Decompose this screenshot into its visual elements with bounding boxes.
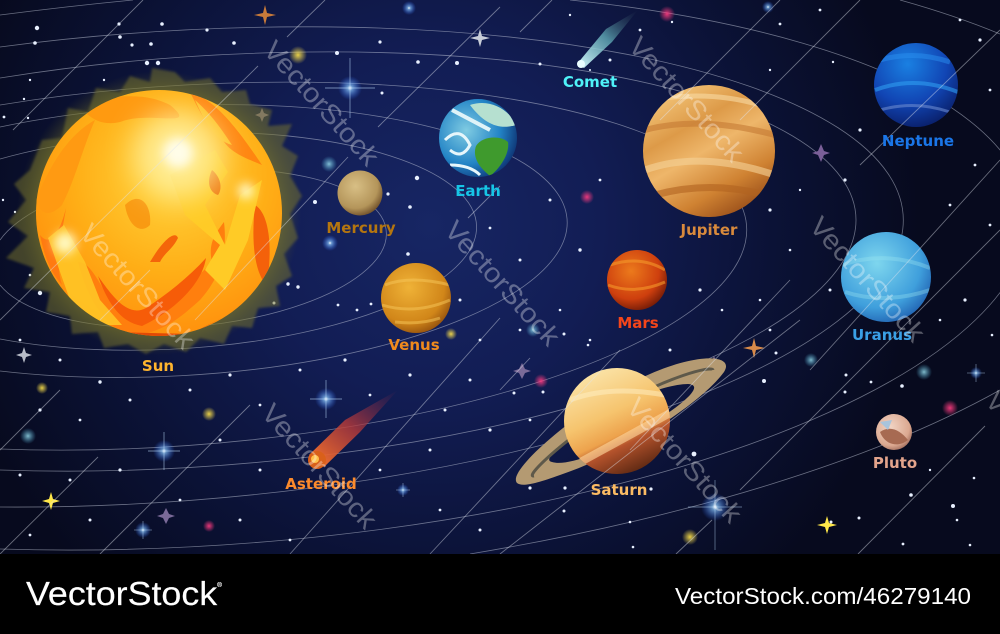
label: Mercury: Mercury bbox=[326, 219, 396, 237]
icon: Mercury bbox=[338, 170, 382, 216]
icon: Comet bbox=[577, 10, 638, 68]
label: Asteroid: Asteroid bbox=[285, 475, 357, 493]
label: Comet: Comet bbox=[563, 73, 617, 91]
footer url: VectorStock.com/46279140 bbox=[675, 583, 971, 609]
label: Mars: Mars bbox=[617, 314, 659, 332]
icon: Saturn bbox=[516, 358, 726, 485]
watermarks: VectorStock bbox=[256, 398, 383, 535]
watermarks: VectorStock bbox=[623, 31, 750, 168]
icon: Venus bbox=[381, 263, 451, 333]
footer brand: ® bbox=[217, 582, 223, 589]
icon: Uranus bbox=[841, 232, 931, 322]
label: Earth: Earth bbox=[455, 182, 501, 200]
label: Saturn: Saturn bbox=[591, 481, 647, 499]
icon: Sun bbox=[6, 68, 302, 355]
footer bar bbox=[0, 554, 1000, 634]
icon: Neptune bbox=[874, 43, 958, 127]
label: Venus: Venus bbox=[388, 336, 440, 354]
watermarks: VectorStock bbox=[804, 211, 931, 348]
watermarks: VectorStock bbox=[439, 215, 566, 352]
label: Uranus: Uranus bbox=[852, 326, 912, 344]
watermarks: VectorStock bbox=[621, 392, 748, 529]
watermarks: VectorStock bbox=[74, 218, 201, 355]
watermarks bbox=[74, 31, 1000, 535]
labels bbox=[142, 73, 954, 499]
icon: Mars bbox=[607, 250, 667, 310]
watermarks: VectorStock bbox=[258, 35, 385, 172]
footer brand: VectorStock bbox=[26, 575, 202, 612]
icon: Asteroid bbox=[308, 390, 398, 469]
label: Neptune: Neptune bbox=[882, 132, 954, 150]
label: Jupiter: Jupiter bbox=[680, 221, 738, 239]
icon: Jupiter bbox=[643, 85, 775, 217]
icon: Earth bbox=[439, 99, 517, 177]
label: Sun: Sun bbox=[142, 357, 174, 375]
label: Pluto: Pluto bbox=[873, 454, 917, 472]
icon: Pluto bbox=[876, 414, 912, 450]
